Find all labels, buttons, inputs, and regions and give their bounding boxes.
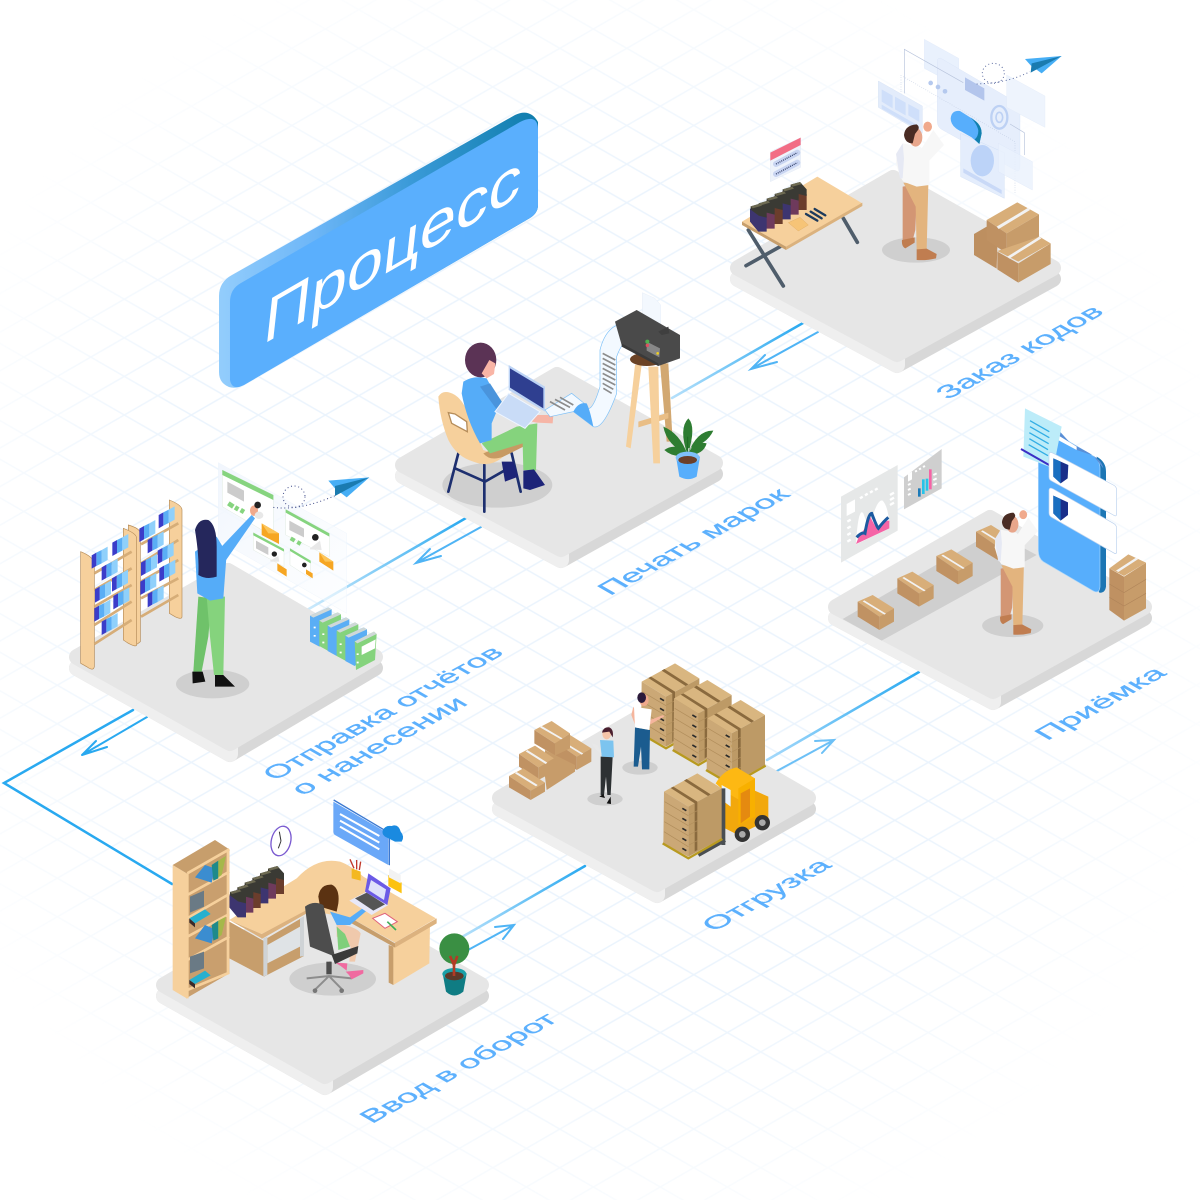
platform	[738, 178, 1053, 365]
cardboard boxes	[509, 721, 591, 800]
shadow	[289, 962, 376, 996]
man	[982, 510, 1043, 637]
arrow: отгрузка to приёмка	[767, 672, 919, 772]
conveyor belt	[843, 532, 1037, 641]
desk	[229, 861, 437, 985]
man	[622, 692, 664, 775]
title badge	[219, 113, 538, 388]
floating screens	[878, 39, 1045, 198]
bookshelves	[81, 500, 182, 669]
label: Ввод в оборот: Ввод в оборот	[353, 1009, 565, 1127]
woman	[462, 343, 553, 490]
desk	[742, 177, 862, 286]
scene	[509, 663, 770, 858]
phone	[1038, 426, 1106, 593]
chair	[438, 392, 528, 512]
icon: chat bubble	[951, 111, 982, 144]
folders	[310, 607, 377, 670]
shadow	[442, 462, 552, 508]
laptop	[349, 873, 391, 915]
laptop	[495, 365, 545, 428]
document	[1021, 408, 1062, 468]
label: о нанесении: о нанесении	[284, 693, 474, 799]
panel: Приёмка	[836, 408, 1146, 702]
arrow: отправка отчётов to ввод в оборот	[4, 710, 172, 884]
printer	[615, 293, 680, 366]
forklift	[698, 767, 770, 855]
email screen	[218, 463, 347, 613]
scene	[438, 293, 713, 512]
platform	[164, 893, 481, 1087]
scene	[742, 39, 1062, 286]
platform	[403, 375, 715, 560]
platform	[77, 571, 375, 754]
plant	[663, 418, 713, 479]
platform	[500, 709, 808, 895]
icon: paper plane	[273, 477, 369, 508]
boxes on belt	[858, 525, 1012, 630]
label: Заказ кодов: Заказ кодов	[929, 302, 1111, 403]
security cards	[1049, 452, 1117, 554]
woman	[587, 727, 623, 806]
seated woman	[305, 885, 371, 979]
pallets	[640, 663, 766, 785]
label: Отгрузка: Отгрузка	[695, 855, 838, 935]
platform	[836, 518, 1144, 702]
boxes	[974, 202, 1051, 283]
bookcase	[173, 840, 229, 998]
panel: Отправка отчётов о нанесении	[77, 463, 377, 754]
desk items	[350, 859, 402, 930]
clock	[268, 824, 294, 858]
office chair	[307, 962, 352, 993]
icon: paper plane	[977, 56, 1062, 84]
scene	[841, 408, 1146, 641]
panel: Отгрузка	[500, 663, 808, 895]
paper ribbon	[545, 323, 645, 427]
panel: Печать марок	[403, 293, 715, 560]
area chart panel	[841, 465, 898, 563]
label: Приёмка: Приёмка	[1028, 663, 1173, 744]
arrow: заказ кодов to печать марок	[672, 323, 818, 398]
scene	[81, 463, 377, 698]
arrow: ввод в оборот to отгрузка	[462, 866, 585, 950]
forklift pallet	[663, 773, 722, 858]
man	[882, 122, 950, 263]
title text: Процесс	[260, 139, 526, 359]
scene	[173, 799, 469, 998]
panel: Ввод в оборот	[164, 799, 481, 1087]
panel: Заказ кодов	[738, 39, 1062, 365]
woman	[176, 502, 263, 698]
stool	[626, 353, 673, 463]
window card	[770, 138, 801, 182]
bar chart panel	[904, 449, 942, 509]
arrow: печать марок to отправка отчётов	[307, 518, 481, 610]
binders	[229, 866, 284, 917]
label: Отправка отчётов: Отправка отчётов	[256, 642, 510, 784]
label: Печать марок: Печать марок	[591, 484, 798, 599]
cloud sign	[333, 799, 403, 865]
stacked boxes	[1109, 554, 1146, 621]
plant	[439, 933, 469, 995]
